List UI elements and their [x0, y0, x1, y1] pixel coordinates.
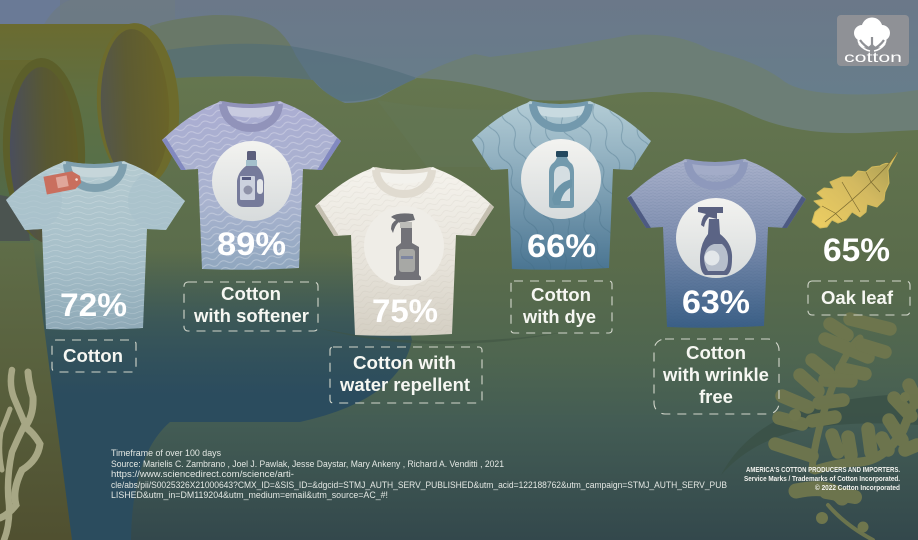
trademark text: © 2022 Cotton Incorporated: [815, 483, 900, 492]
ground strip: [0, 243, 72, 540]
background sky corner: [0, 0, 60, 26]
percentage: dye: 66%: [527, 228, 596, 264]
trademark text: [744, 465, 900, 492]
icon: price tag: [43, 170, 82, 194]
icon: oak leaf: [812, 153, 897, 228]
icon: wrinkle spray bottle: [698, 207, 732, 275]
label: repellent: [330, 347, 482, 403]
percentage: cotton: 72%: [60, 287, 127, 323]
shirt: cotton with dye: [472, 101, 651, 270]
label: dye: with dye: [522, 307, 596, 327]
shirt: cotton with softener: [162, 101, 341, 270]
shirt: cotton with water repellent: [315, 167, 494, 336]
label: cotton: [52, 340, 136, 372]
dark leaf right: [721, 394, 918, 475]
label: oak leaf: Oak leaf: [821, 288, 894, 308]
label: repellent: Cotton with: [353, 353, 456, 373]
label: softener: [184, 282, 318, 331]
label: softener: with softener: [193, 306, 309, 326]
logo: cotton: cotton: [844, 49, 902, 65]
label: wrinkle free: with wrinkle: [662, 365, 769, 385]
logo: cotton: [837, 15, 909, 66]
background lighter wedge: [377, 100, 640, 167]
source footnote: Source: Marielis C. Zambrano , Joel J. Pawlak, Jesse Daystar, Mary Ankeny , Richard A. Venditti , 2021: [111, 459, 504, 469]
percentage: wrinkle free: 63%: [682, 284, 750, 320]
seaweed right: [775, 319, 918, 540]
seaweed left: [0, 370, 40, 540]
label: wrinkle free: Cotton: [686, 343, 746, 363]
label: repellent: water repellent: [339, 375, 470, 395]
background blue water: [33, 245, 412, 540]
source footnote: https://www.sciencedirect.com/science/arti-: [111, 469, 294, 479]
icon: softener bottle: [237, 151, 264, 207]
label: cotton: Cotton: [63, 346, 123, 366]
source footnote: cle/abs/pii/S0025326X21000643?CMX_ID=&SIS_ID=&dgcid=STMJ_AUTH_SERV_PUBLISHED&utm_acid=122188762&utm_campaign=STMJ_AUTH_SERV_PUB: [111, 480, 727, 490]
shirt: cotton: [6, 161, 185, 330]
icon: repellent spray bottle: [391, 213, 421, 280]
background hills: [43, 0, 918, 140]
shirt: cotton with wrinkle free: [627, 159, 806, 328]
pipes: [0, 21, 183, 244]
label: softener: Cotton: [221, 284, 281, 304]
label: wrinkle free: [654, 339, 779, 414]
percentage: repellent: 75%: [372, 293, 438, 329]
percentage: softener: 89%: [217, 226, 286, 262]
percentage: oak leaf: 65%: [823, 232, 890, 268]
shadow under shirt: [318, 328, 565, 344]
icon: dye bottle: [549, 151, 574, 208]
label: dye: Cotton: [531, 285, 591, 305]
label: oak leaf: [808, 281, 910, 315]
source footnote: Timeframe of over 100 days: [111, 448, 221, 458]
source footnote: LISHED&utm_in=DM119204&utm_medium=email&utm_source=AC_#!: [111, 490, 388, 500]
label: dye: [511, 281, 612, 333]
source footnote: [111, 448, 727, 500]
background sky: [0, 0, 918, 140]
label: wrinkle free: free: [699, 387, 733, 407]
seaweed buds: [789, 392, 910, 532]
background dark foreground: [131, 340, 918, 540]
